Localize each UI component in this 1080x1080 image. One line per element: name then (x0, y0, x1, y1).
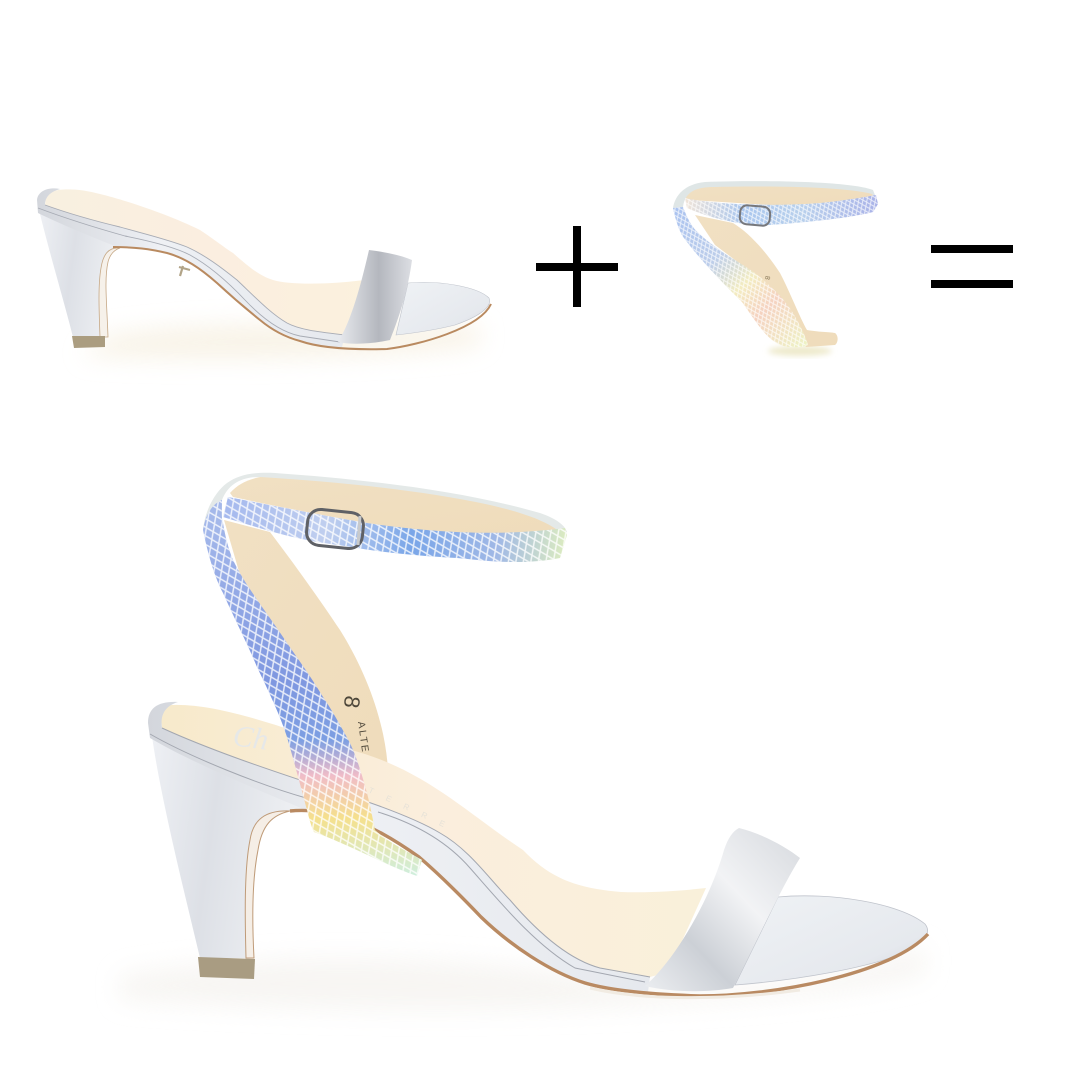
strap diagonal band (203, 500, 422, 876)
equals sign (931, 245, 1013, 288)
sandal sole (290, 810, 928, 996)
sandal heel tip (198, 957, 255, 979)
sandal sole edge (590, 988, 800, 998)
small strap size mark: 8 (763, 275, 770, 280)
brand text: ALTE (355, 721, 370, 754)
sandal insole logo: Ch (231, 719, 270, 757)
mule rim seam (38, 205, 345, 342)
size label on lining (339, 694, 370, 754)
sandal insole brand letters: TERRE (367, 786, 459, 835)
shoe: assembled sandal (120, 473, 928, 1010)
sandal heel inner face (245, 811, 290, 958)
plus sign (536, 226, 618, 307)
sandal silver rim (148, 702, 650, 992)
mule sole (113, 247, 491, 349)
small strap down lining (695, 215, 838, 347)
sandal ground shadow (120, 945, 925, 1010)
mule heel tip (72, 336, 105, 348)
small strap ankle band (685, 195, 878, 225)
small strap buckle (739, 205, 771, 226)
small strap outer edge (673, 181, 878, 208)
mule front strap (338, 250, 412, 344)
detachable strap (673, 181, 878, 356)
sandal insole (160, 705, 706, 977)
size number: 8 (339, 694, 365, 710)
under-rim strap tab (378, 838, 420, 872)
small strap shadow (768, 346, 832, 356)
mule ground shadow (80, 323, 480, 358)
sandal front strap (645, 828, 800, 991)
mule heel (39, 210, 125, 337)
mule insole (45, 189, 372, 335)
mule silver rim (37, 188, 345, 347)
strap buckle (305, 508, 365, 550)
strap outer edge (203, 473, 567, 532)
shoe: silver mule (37, 188, 491, 358)
sandal heel (152, 736, 306, 958)
mule pin (179, 266, 190, 276)
strap down lining (224, 520, 388, 770)
sandal rim seam (150, 728, 650, 982)
mule heel inner face (99, 248, 120, 337)
strap ankle band (223, 497, 567, 562)
sandal toe (735, 896, 928, 985)
small strap back lining (680, 183, 873, 208)
mule toe (396, 282, 490, 335)
strap back lining (230, 476, 560, 535)
small strap diagonal band (673, 207, 808, 347)
